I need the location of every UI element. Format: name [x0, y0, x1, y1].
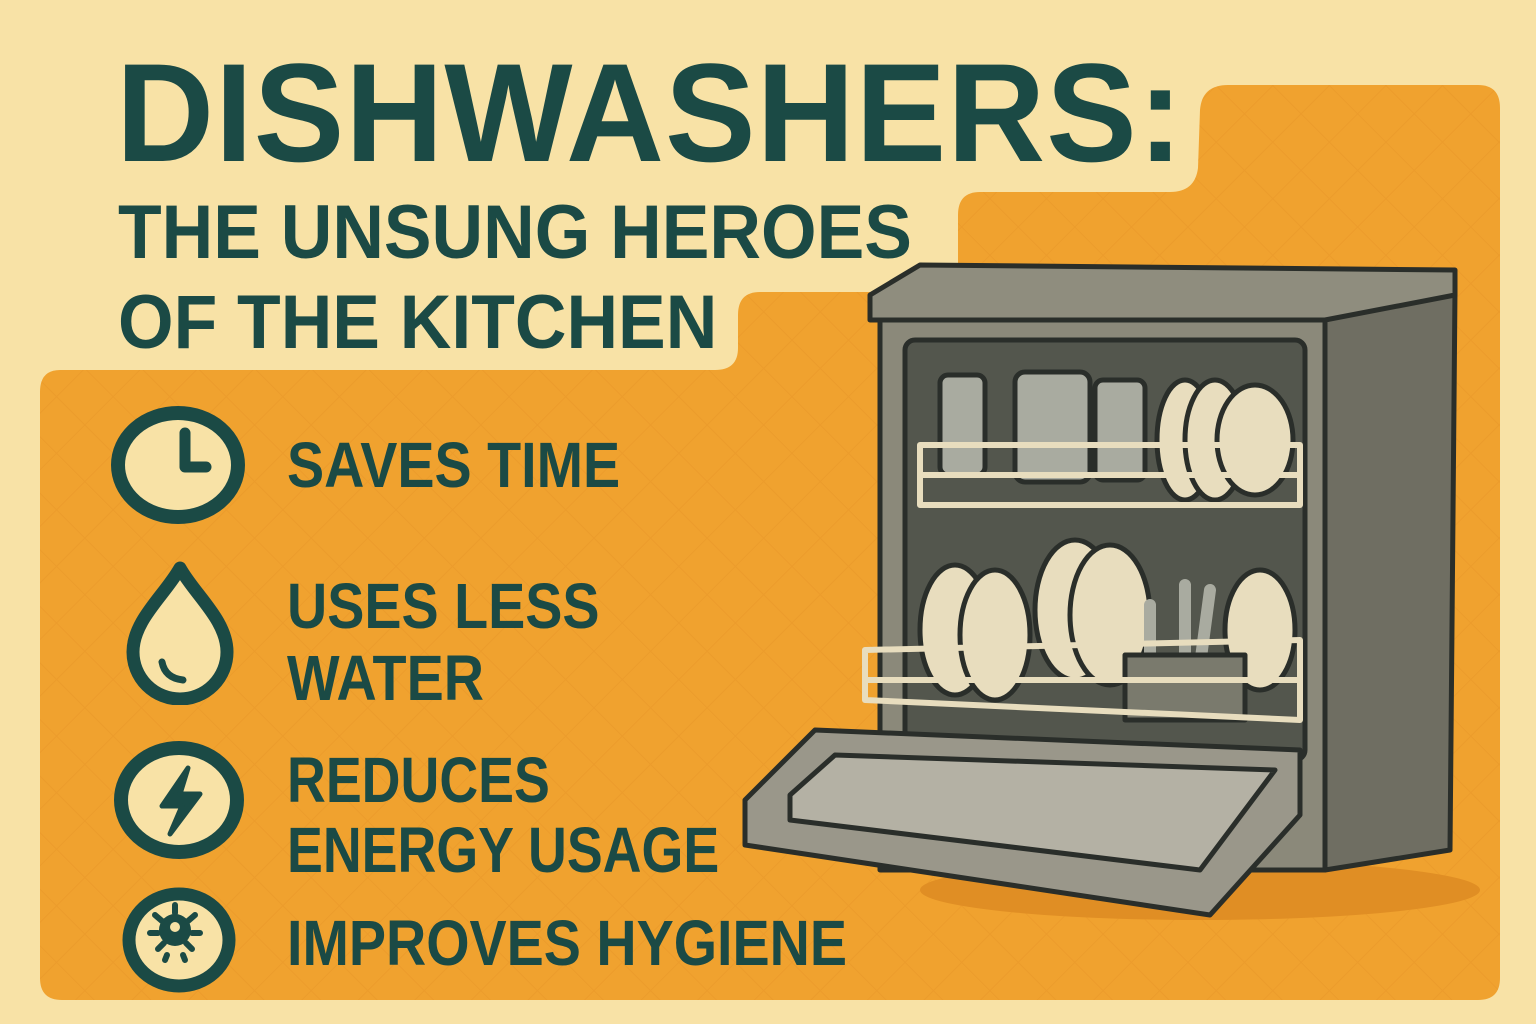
lower rack — [865, 640, 1300, 720]
text: reduces energy usage — [287, 744, 719, 886]
upper rack — [920, 445, 1300, 505]
text: uses less water — [287, 570, 600, 714]
door — [745, 730, 1300, 915]
interior — [905, 340, 1305, 760]
text: uses less water: USES LESS — [287, 570, 600, 642]
subtitle: THE UNSUNG HEROES — [118, 190, 912, 275]
text: improves hygiene: IMPROVES HYGIENE — [287, 907, 847, 979]
side body — [1325, 290, 1455, 870]
icon: clock — [111, 406, 245, 524]
title: DISHWASHERS: — [116, 34, 1184, 191]
text: reduces energy usage: REDUCES — [287, 744, 550, 816]
icon: lightning — [114, 741, 244, 859]
icon: water drop — [126, 562, 234, 705]
text: uses less water: WATER — [287, 642, 484, 714]
icon: germ — [122, 888, 236, 992]
top — [870, 265, 1455, 320]
lower dishes — [920, 565, 990, 695]
subtitle — [118, 190, 912, 365]
text: reduces energy usage: ENERGY USAGE — [287, 814, 719, 886]
subtitle: OF THE KITCHEN — [118, 280, 717, 365]
shadow — [920, 860, 1480, 920]
upper dishes — [940, 375, 985, 475]
text: saves time: SAVES TIME — [287, 429, 620, 501]
